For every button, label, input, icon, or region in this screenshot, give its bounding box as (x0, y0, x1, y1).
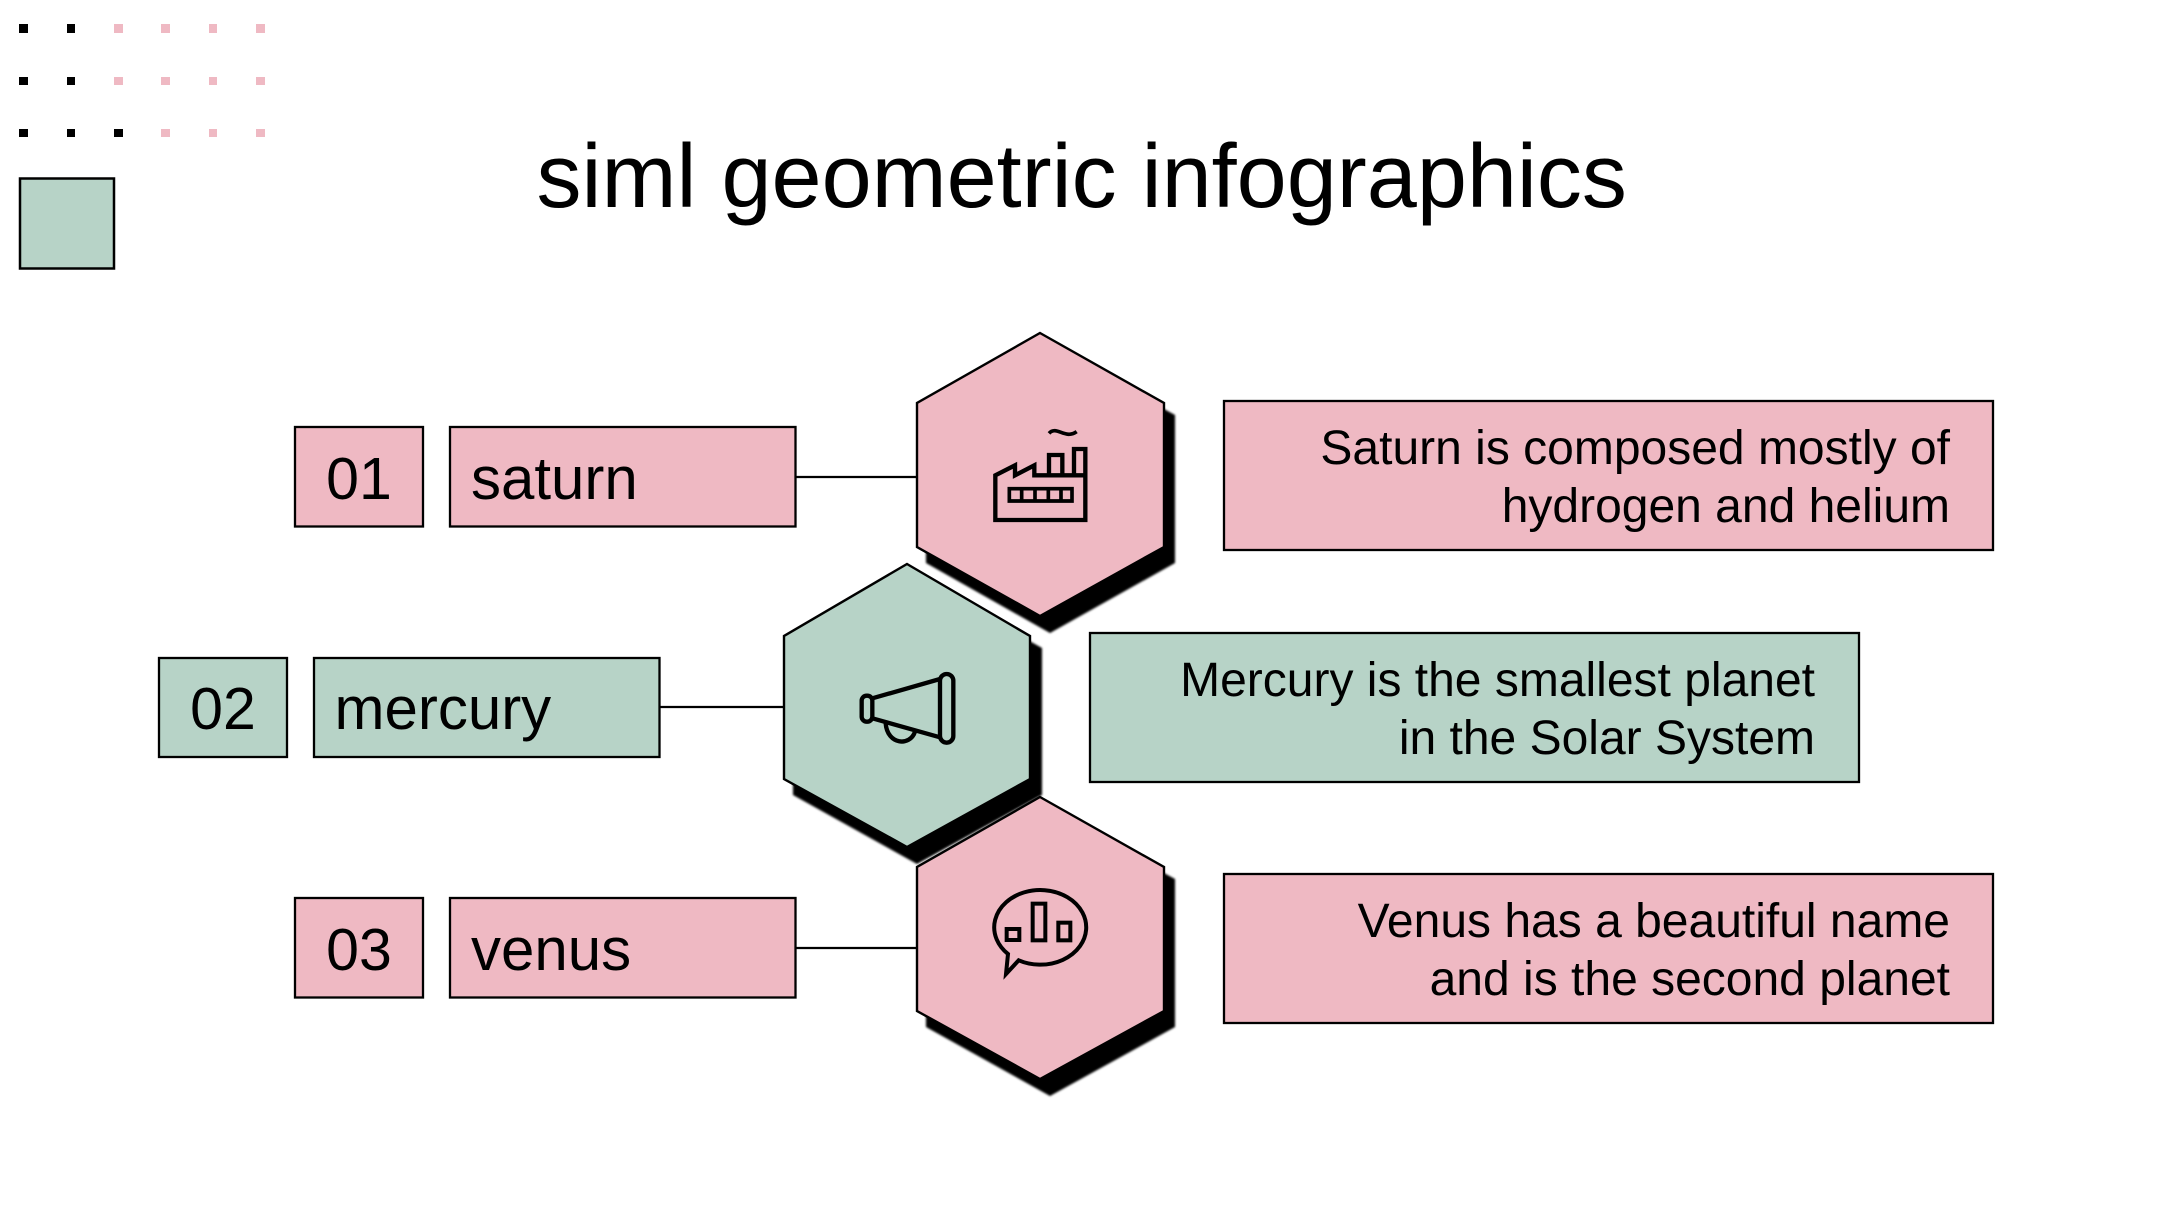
icon: factory (995, 431, 1085, 520)
row 03: venus labels (295, 898, 796, 998)
name box saturn (450, 427, 796, 526)
description box: venus: Venus has a beautiful name (1358, 895, 1950, 948)
number box 03 (295, 898, 423, 998)
name box mercury (314, 658, 660, 757)
row 02: mercury labels (159, 658, 660, 757)
number box 02: 02 (190, 676, 256, 742)
connector line: saturn (796, 476, 918, 478)
hexagon: venus with chart speech bubble icon (917, 797, 1175, 1096)
description box: venus: and is the second planet (1430, 953, 1950, 1006)
hexagon: mercury with megaphone icon (784, 564, 1042, 864)
description box: saturn: hydrogen and helium (1502, 480, 1950, 533)
connector line: venus (796, 947, 919, 949)
description box: saturn: Saturn is composed mostly of (1320, 422, 1951, 475)
connector line: mercury (660, 706, 785, 708)
row 01: saturn labels (295, 427, 796, 526)
name box mercury: mercury (334, 675, 551, 742)
description box: venus (1224, 874, 1993, 1023)
hexagon: saturn with factory icon (917, 333, 1175, 633)
name box venus: venus (471, 916, 631, 983)
title: siml geometric infographics (536, 127, 1627, 227)
icon: speech bubble with bars (994, 890, 1086, 974)
icon: megaphone (862, 674, 953, 743)
description box: saturn (1224, 401, 1993, 550)
decorative green square (20, 178, 114, 268)
decorative dot grid (19, 24, 265, 137)
description box: mercury: in the Solar System (1399, 712, 1815, 765)
number box 03: 03 (326, 917, 392, 983)
description box: mercury (1090, 633, 1859, 782)
number box 01 (295, 427, 423, 526)
name box venus (450, 898, 796, 998)
name box saturn: saturn (471, 445, 638, 512)
description box: mercury: Mercury is the smallest planet (1180, 654, 1815, 707)
number box 01: 01 (326, 446, 392, 512)
number box 02 (159, 658, 287, 757)
